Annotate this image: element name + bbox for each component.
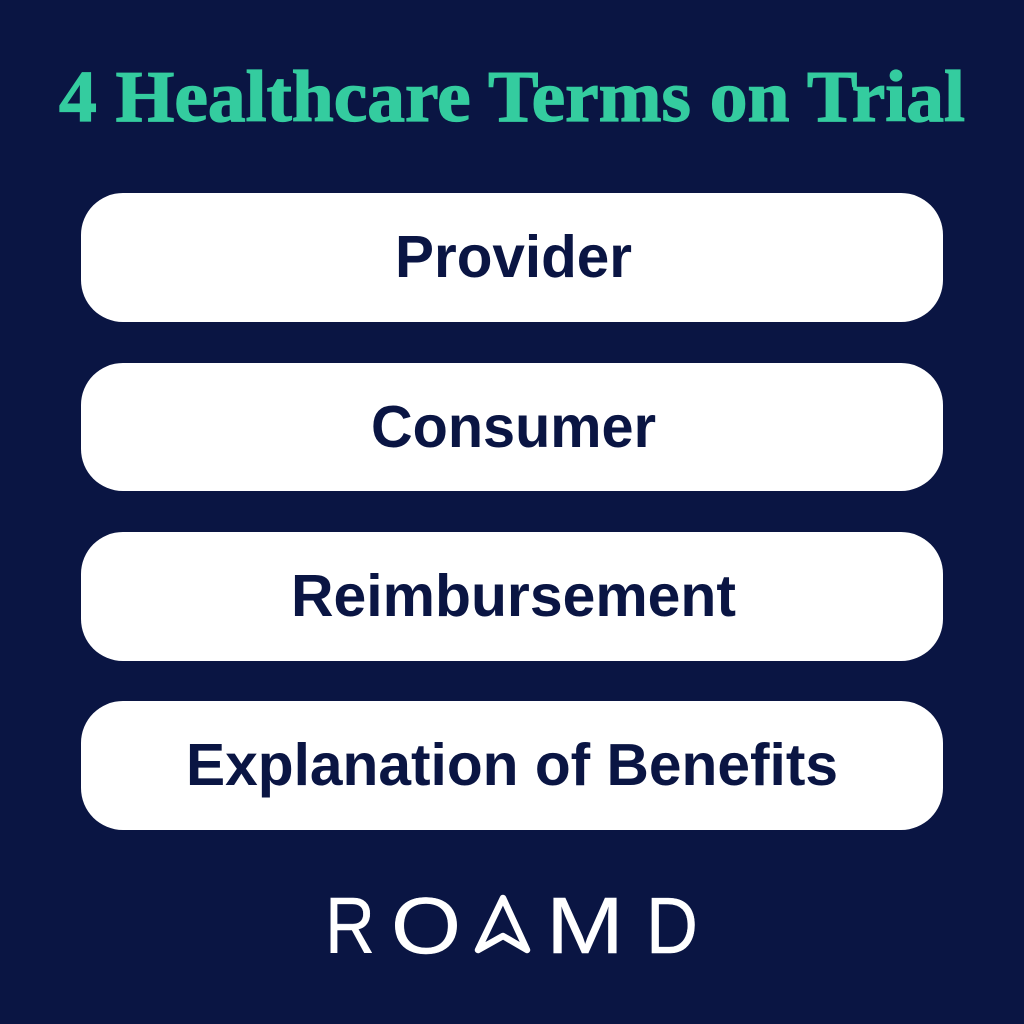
logo: ROAMD	[325, 881, 698, 970]
panel: Reimbursement: Reimbursement	[291, 563, 736, 629]
panel: Provider: Provider	[395, 224, 632, 290]
panel: Explanation of Benefits: Explanation of Benefits	[186, 732, 838, 798]
panel: Consumer	[81, 363, 943, 491]
panel: Reimbursement	[81, 532, 943, 661]
logo: ROAMD: R	[325, 881, 375, 970]
logo: ROAMD: M	[546, 881, 624, 970]
logo: ROAMD: O	[391, 881, 461, 970]
logo: ROAMD: D	[646, 881, 698, 970]
panel: Explanation of Benefits	[81, 701, 943, 830]
title: 4 Healthcare Terms on Trial	[59, 56, 965, 137]
panel: Provider	[81, 193, 943, 322]
panel: Consumer: Consumer	[371, 394, 656, 460]
